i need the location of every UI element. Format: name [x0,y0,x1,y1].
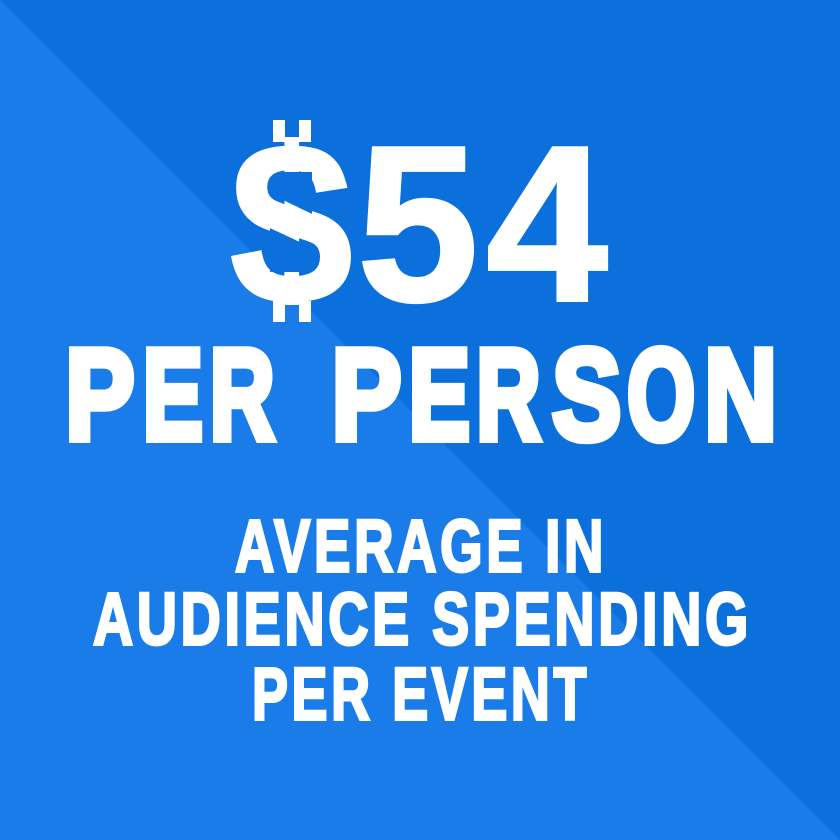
subheading: per person: O [627,323,695,467]
subheading: per person: P [332,323,401,466]
headline amount: 5 [357,100,479,348]
description text: AVERAGE IN [235,504,607,588]
description text [93,504,752,736]
subheading: per person: N [704,323,777,467]
subheading: per person: R [210,322,275,467]
subheading: per person: E [143,322,203,467]
headline amount [231,120,608,322]
subheading: per person [65,322,777,467]
description text: PER EVENT [252,652,590,736]
subheading: per person: P [65,322,134,467]
dollar sign: $ [230,95,353,352]
subheading: per person: E [409,323,470,467]
headline amount: 4 [486,100,608,348]
subheading: per person: R [476,324,541,467]
subheading: per person: S [552,322,621,467]
